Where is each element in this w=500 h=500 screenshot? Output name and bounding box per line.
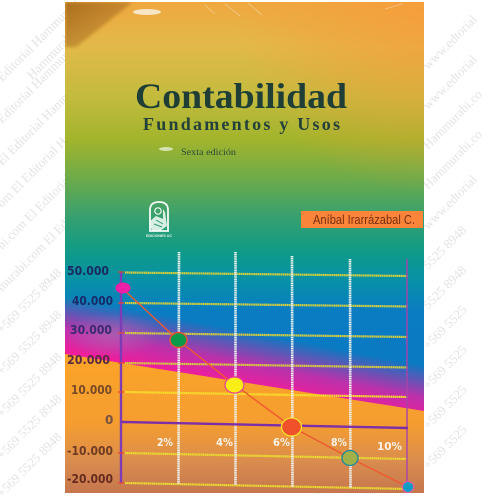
- watermark text: 5525 8948: [420, 222, 469, 272]
- y axis labels: -20.000: [67, 472, 113, 486]
- y axis labels: 20.000: [67, 353, 110, 367]
- watermark text: Hammurabi: [24, 27, 78, 82]
- edition: Sexta edición: [181, 148, 236, 158]
- watermark text: Hammurabi.co: [420, 127, 485, 192]
- title: Contabilidad: [135, 76, 347, 116]
- watermark text: www.edtorial: [420, 52, 480, 112]
- y axis labels: 0: [105, 413, 113, 427]
- watermark text: 5525 8948: [420, 262, 469, 312]
- y axis labels: 10.000: [71, 383, 112, 397]
- watermark text: +569 5525: [420, 342, 470, 392]
- y axis labels: [67, 264, 113, 486]
- chart: [67, 252, 414, 492]
- trend line: [122, 288, 408, 487]
- grid lines: [125, 272, 408, 489]
- y axis labels: 50.000: [67, 264, 109, 278]
- data points: [116, 282, 414, 492]
- y axis labels: 30.000: [70, 323, 112, 337]
- icon: publisher logo: [146, 202, 172, 238]
- x axis labels: 6%: [273, 436, 290, 449]
- cover background: [62, 2, 424, 493]
- x axis labels: [157, 436, 402, 453]
- x axis labels: 8%: [331, 436, 347, 449]
- x axis labels: 10%: [377, 440, 402, 453]
- y axis labels: 40.000: [72, 294, 113, 308]
- watermark text: +569 5525: [420, 382, 470, 432]
- watermark text: Hammurabi.co: [420, 87, 485, 152]
- watermark text: www.edtorial: [420, 172, 480, 232]
- watermark text: www.edtorial: [420, 12, 480, 72]
- publisher name: EDICIONES UC: [146, 234, 172, 238]
- watermark text: +569 5525: [420, 422, 470, 472]
- x axis labels: 2%: [157, 436, 173, 449]
- author label: Aníbal Irarrázabal C.: [313, 213, 415, 227]
- y axis: [120, 272, 122, 483]
- y axis labels: -10.000: [67, 444, 113, 458]
- x axis labels: 4%: [216, 436, 233, 449]
- watermark text: +569 5525: [420, 302, 470, 352]
- zero line: [122, 422, 408, 428]
- subtitle: Fundamentos y Usos: [143, 114, 340, 134]
